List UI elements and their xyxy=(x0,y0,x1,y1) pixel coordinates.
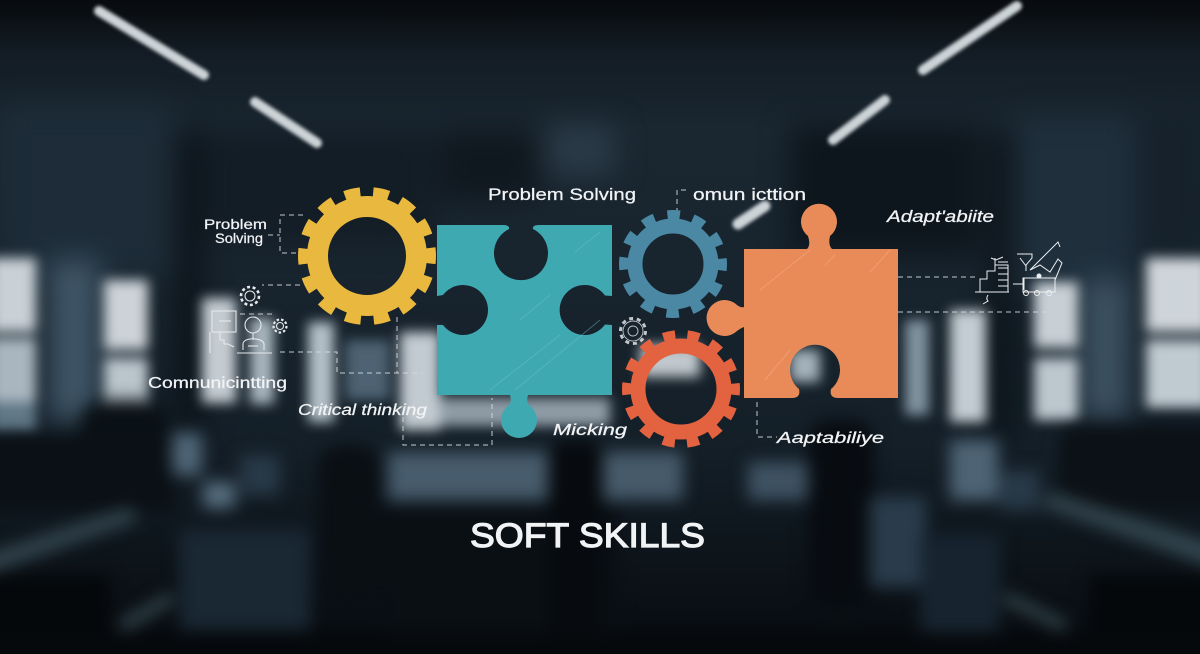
label: Problem Solving top: Problem Solving xyxy=(488,185,636,204)
label: Communicating: Comnunicintting xyxy=(148,375,287,392)
label: Comunication top: omun icttion xyxy=(693,186,806,204)
label: Problem Solving left xyxy=(204,216,267,246)
icon: outline gear centre xyxy=(620,318,646,344)
icon: person at presentation board xyxy=(210,311,272,353)
label: Critical thinking: Critical thinking xyxy=(298,402,427,419)
gear: yellow xyxy=(304,193,430,319)
icon: small gear left top xyxy=(241,287,259,305)
wall and ceiling masses xyxy=(0,0,1200,440)
silhouettes, desks and monitors xyxy=(0,400,1200,654)
label: Micking: Micking xyxy=(553,422,628,439)
label: Problem Solving left: Solving xyxy=(215,230,263,246)
gear: red xyxy=(627,335,735,443)
icon: adaptability tools xyxy=(975,242,1062,304)
bright windows xyxy=(0,258,1200,432)
title: SOFT SKILLS xyxy=(470,517,705,555)
dashed connector lines xyxy=(240,190,1052,445)
puzzle piece: orange xyxy=(707,204,898,398)
ceiling lights xyxy=(99,6,1017,224)
icon: small gear left right xyxy=(274,320,286,332)
label: Problem Solving left: Problem xyxy=(204,216,267,232)
puzzle piece: teal xyxy=(437,225,612,438)
gear: blue xyxy=(624,215,722,313)
label: Aaptabiliye: Aaptabiliye xyxy=(776,430,885,447)
label: Adaptabilite: Adapt'abiite xyxy=(886,208,994,226)
